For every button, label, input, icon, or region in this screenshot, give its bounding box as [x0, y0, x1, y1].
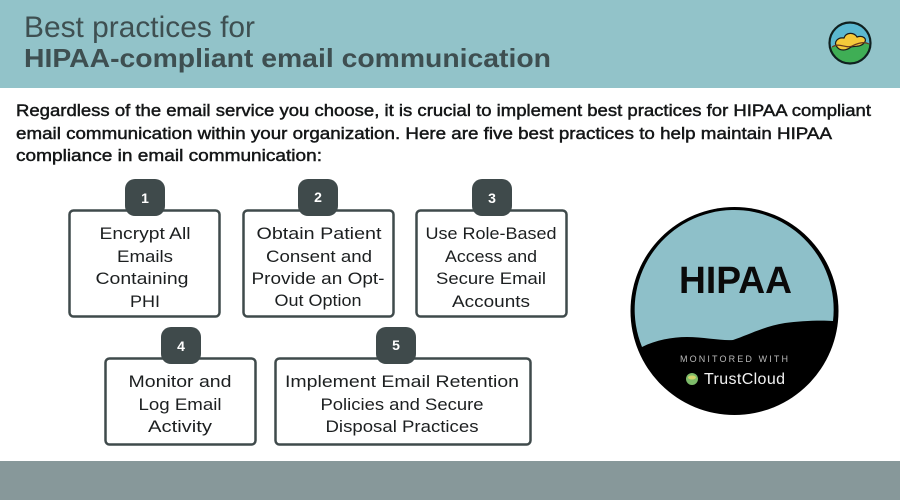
card 3: role-based access: 3 [488, 190, 496, 206]
card 5: retention and disposal: Disposal Practices [326, 417, 478, 436]
card 1: encrypt emails: Encrypt All [100, 224, 190, 243]
icon: small TrustCloud logo [686, 373, 698, 385]
card 4: monitor and log: Log Email [138, 395, 222, 414]
card 2: patient consent: Obtain Patient [256, 224, 382, 243]
intro paragraph: Regardless of the email service you choose, it is crucial to implement best practices for HIPAA compliant [16, 102, 871, 120]
intro paragraph [16, 102, 871, 165]
title line 2: HIPAA-compliant email communication [24, 43, 551, 73]
card 3: role-based access [416, 179, 566, 316]
card 5: retention and disposal: 5 [392, 337, 400, 353]
card 2: patient consent: Consent and [266, 247, 372, 266]
card 4: monitor and log: 4 [177, 338, 185, 354]
card 5: retention and disposal: Policies and Secure [320, 395, 484, 414]
card 4: monitor and log: Activity [148, 417, 213, 436]
HIPAA badge [630, 207, 838, 415]
card 3: role-based access: Access and [445, 247, 537, 266]
card 1: encrypt emails: 1 [141, 190, 149, 206]
card 3: role-based access: Accounts [452, 292, 530, 311]
card 5: retention and disposal [276, 327, 530, 444]
intro paragraph: email communication within your organization. Here are five best practices to help maintain HIPAA [16, 125, 832, 143]
card 1: encrypt emails: Containing [96, 269, 188, 288]
card 3: role-based access: Use Role-Based [426, 224, 556, 243]
card 2: patient consent: Out Option [274, 291, 362, 310]
card 4: monitor and log [106, 327, 256, 444]
card 3: role-based access: Secure Email [436, 269, 546, 288]
card 1: encrypt emails: Emails [117, 247, 173, 266]
HIPAA badge: HIPAA [679, 260, 792, 302]
HIPAA badge: TrustCloud [704, 371, 785, 388]
card 5: retention and disposal: Implement Email Retention [285, 372, 519, 391]
icon: TrustCloud logo [830, 22, 870, 64]
title line 1: Best practices for [24, 11, 255, 44]
footer band [0, 461, 900, 500]
card 2: patient consent [244, 179, 394, 316]
card 2: patient consent: 2 [314, 189, 322, 205]
header band [0, 0, 900, 88]
card 1: encrypt emails [70, 179, 220, 316]
card 1: encrypt emails: PHI [130, 292, 160, 311]
card 4: monitor and log: Monitor and [128, 372, 232, 391]
intro paragraph: compliance in email communication: [16, 147, 322, 165]
card 2: patient consent: Provide an Opt- [252, 269, 384, 288]
HIPAA badge: MONITORED WITH [680, 354, 788, 364]
